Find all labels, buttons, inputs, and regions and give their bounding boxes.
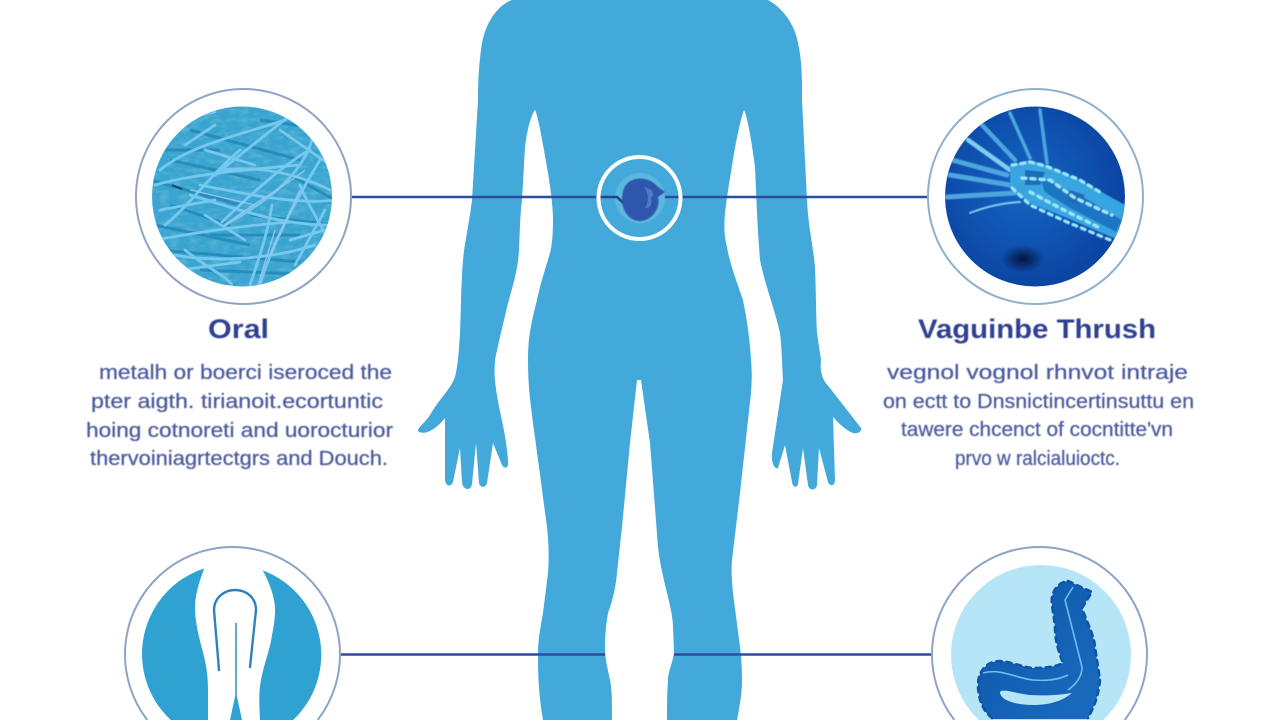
image: oral fungal threads xyxy=(150,104,335,289)
icon: intestine xyxy=(978,581,1100,719)
text block: vaginal thrush description: vegnol vognol rhnvot intraje xyxy=(887,362,1188,384)
text block: oral description xyxy=(86,362,393,470)
heading: vaginal thrush: Vaguinbe Thrush xyxy=(918,314,1156,344)
image: vaginal thrush microbe xyxy=(945,106,1125,286)
connector line: bottom left xyxy=(340,653,605,656)
panel: genital illustration xyxy=(125,547,340,720)
connector line: top left xyxy=(351,196,597,198)
human body silhouette xyxy=(418,0,861,720)
panel: gut illustration xyxy=(932,547,1147,720)
connector line: top right xyxy=(660,196,928,198)
text block: oral description: pter aigth. tirianoit.ecortuntic xyxy=(91,391,383,413)
text block: oral description: thervoiniagrtectgrs and Douch. xyxy=(90,448,388,470)
central abdomen marker xyxy=(597,157,680,239)
ring: oral xyxy=(136,89,351,304)
panel: oral xyxy=(136,89,351,304)
text block: oral description: metalh or boerci iseroced the xyxy=(99,362,392,384)
text block: vaginal thrush description: prvo w ralcialuioctc. xyxy=(955,448,1120,470)
connector line: bottom right xyxy=(674,653,932,656)
background disc xyxy=(951,565,1131,720)
icon: anatomy diagram xyxy=(142,565,321,720)
heading: oral: Oral xyxy=(208,314,269,344)
text block: vaginal thrush description xyxy=(883,362,1194,470)
text block: vaginal thrush description: on ectt to Dnsnictincertinsuttu en xyxy=(883,391,1194,413)
text block: vaginal thrush description: tawere chcenct of cocntitte'vn xyxy=(901,419,1173,441)
ring: bottom left xyxy=(125,547,340,720)
text block: oral description: hoing cotnoreti and uorocturior xyxy=(86,420,393,442)
ring: bottom right xyxy=(932,547,1147,720)
ring: vaginal thrush xyxy=(928,89,1143,304)
panel: vaginal thrush xyxy=(928,89,1143,304)
